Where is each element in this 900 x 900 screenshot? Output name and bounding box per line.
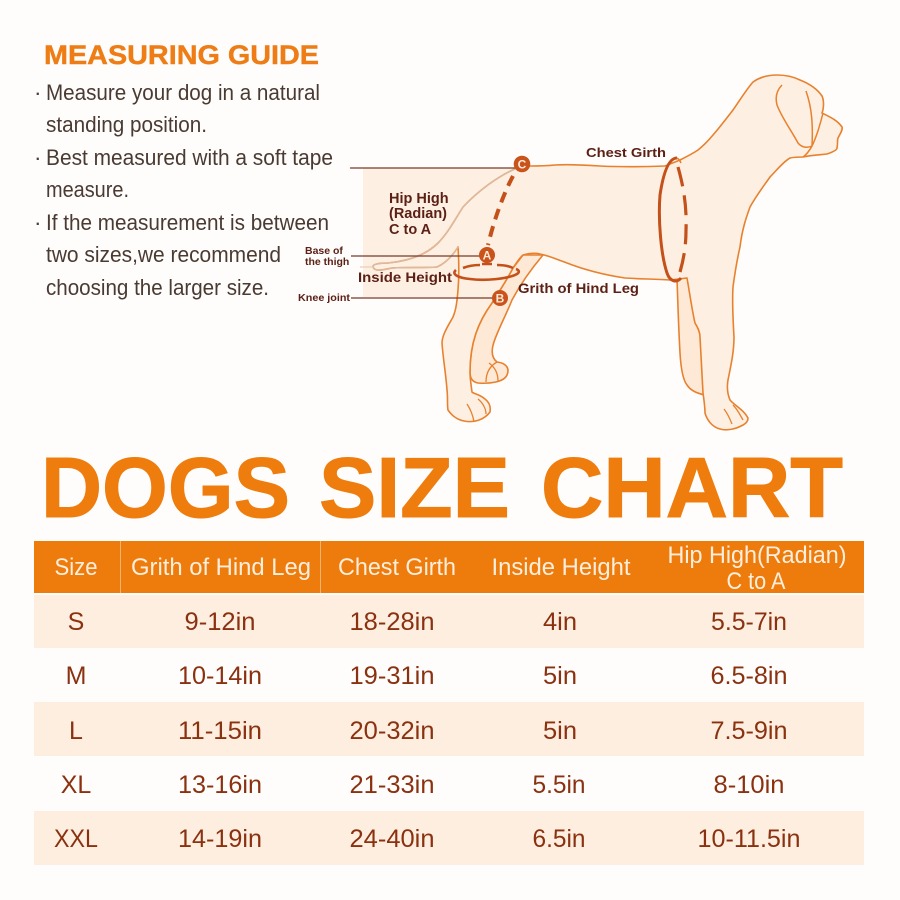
row XXL (34, 811, 864, 865)
row M (66, 662, 788, 690)
marker B: B (496, 292, 505, 306)
leader lines (350, 168, 516, 298)
far hind leg (470, 255, 543, 383)
row XXL: 10-11.5in (698, 825, 800, 853)
ear (776, 85, 823, 157)
label: base of the thigh: the thigh (305, 256, 349, 268)
table header (34, 541, 864, 595)
row XXL: 24-40in (350, 825, 434, 853)
table header: C to A (726, 568, 786, 595)
marker C (514, 156, 530, 172)
row XL: 5.5in (532, 771, 586, 799)
title: CHART (541, 441, 843, 536)
title: SIZE (319, 441, 510, 536)
row S: S (68, 608, 84, 636)
thigh girth ellipse (454, 264, 519, 280)
table header: Chest Girth (338, 554, 456, 581)
row L: 5in (543, 717, 577, 745)
text block: guide tips: two sizes,we recommend (46, 242, 281, 267)
hip high dashed line (488, 176, 513, 245)
heading: measuring guide: MEASURING GUIDE (44, 40, 319, 70)
marker A (479, 247, 495, 263)
row S: 5.5-7in (711, 608, 787, 636)
row L (34, 702, 864, 756)
marker A: A (483, 248, 492, 262)
text block: guide tips (34, 80, 333, 300)
marker C: C (518, 158, 527, 172)
row L: 7.5-9in (710, 717, 788, 745)
row M: 6.5-8in (710, 662, 788, 690)
thigh tail shading edge (373, 168, 517, 270)
text block: guide tips: choosing the larger size. (46, 275, 269, 300)
hip shaded panel (363, 168, 530, 297)
label: hip high: (Radian) (389, 206, 447, 222)
row XXL: XXL (54, 825, 98, 853)
row XL (61, 771, 784, 799)
row M: 5in (543, 662, 577, 690)
table header: Size (54, 554, 98, 581)
title (41, 441, 843, 536)
row M: M (66, 662, 86, 690)
row XXL: 6.5in (532, 825, 586, 853)
label: grith of hind leg: Grith of Hind Leg (518, 281, 639, 296)
row L: L (69, 717, 83, 745)
text block: guide tips: · (34, 80, 42, 105)
text block: guide tips: standing position. (46, 112, 207, 137)
paw toes (467, 362, 743, 424)
table header: Hip High(Radian) (668, 542, 846, 569)
row S: 18-28in (350, 608, 434, 636)
dog body outline (373, 75, 842, 430)
text block: guide tips: Best measured with a soft tape (46, 145, 333, 170)
row XL: XL (61, 771, 91, 799)
dog diagram (298, 75, 842, 430)
row S: 4in (543, 608, 577, 636)
chest girth band (659, 158, 686, 281)
row XXL: 14-19in (178, 825, 262, 853)
label: inside height: Inside Height (358, 269, 452, 285)
text block: guide tips: measure. (46, 177, 129, 202)
text block: guide tips: · (34, 210, 42, 235)
label: base of the thigh: Base of (305, 245, 343, 257)
row L: 11-15in (178, 717, 262, 745)
label: chest girth: Chest Girth (586, 145, 666, 160)
label: knee joint: Knee joint (298, 293, 351, 304)
far front leg (677, 278, 704, 395)
marker B (492, 290, 508, 306)
label: hip high: C to A (389, 222, 432, 238)
row M: 19-31in (350, 662, 434, 690)
row XL: 21-33in (350, 771, 434, 799)
panel: measuring guide (34, 40, 333, 300)
row L: 20-32in (350, 717, 434, 745)
row XL: 8-10in (714, 771, 784, 799)
text block: guide tips: · (34, 145, 42, 170)
label: hip high: Hip High (389, 191, 449, 207)
table header: Grith of Hind Leg (131, 554, 311, 581)
row S: 9-12in (184, 608, 256, 636)
table header: Inside Height (492, 554, 631, 581)
row S (34, 595, 864, 648)
title: DOGS (41, 441, 290, 536)
text block: guide tips: Measure your dog in a natural (46, 80, 320, 105)
row XL: 13-16in (178, 771, 262, 799)
text block: guide tips: If the measurement is between (46, 210, 329, 235)
row M: 10-14in (178, 662, 262, 690)
size table (34, 541, 864, 865)
